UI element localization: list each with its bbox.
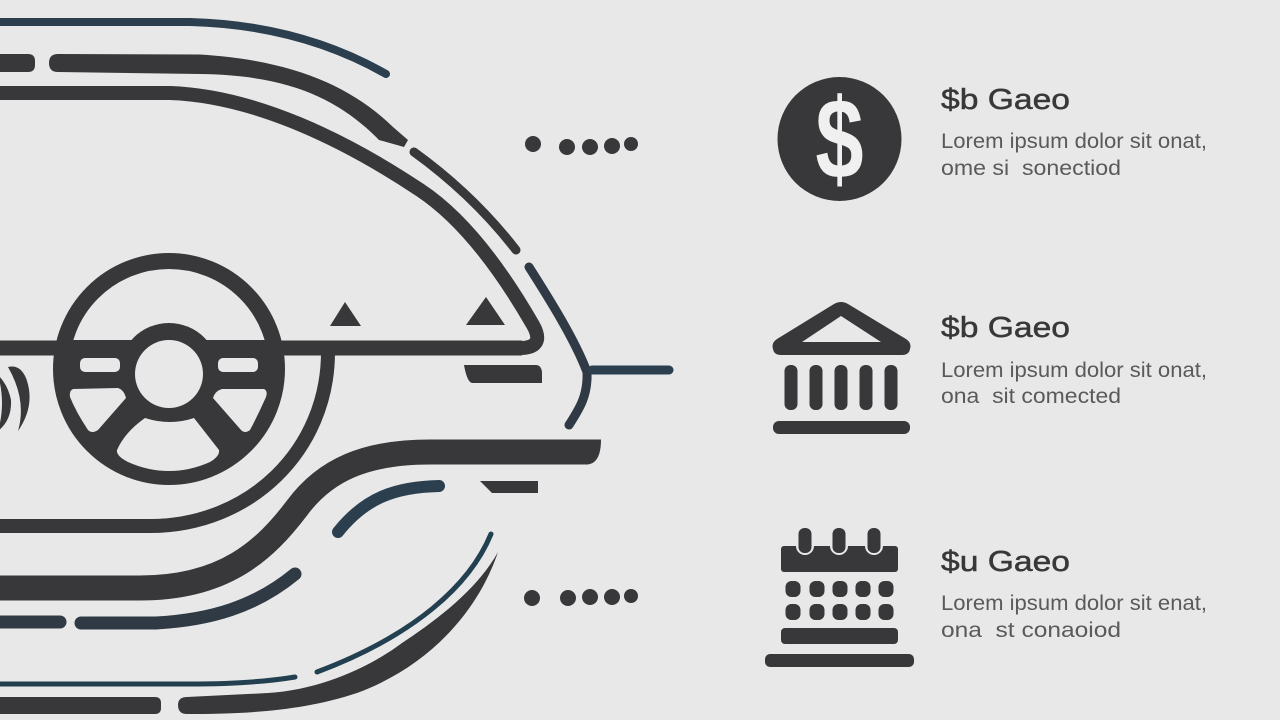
body three: Lorem ipsum dolor sit enat, [941,592,1207,615]
spoke window left [80,358,120,372]
left crescents [0,366,30,431]
heading three: $u Gaeo [941,546,1070,578]
body one line two: ome si sonectiod [941,157,1121,180]
lower left window [70,388,126,432]
triangle small [330,302,361,326]
tapered dark arc [178,552,498,714]
spoke window right [218,358,258,372]
icon: bank building [772,302,910,434]
thin navy arc lower [0,677,295,684]
heading one: $b Gaeo [941,84,1070,116]
heading two: $b Gaeo [941,312,1070,344]
connector line [592,366,669,374]
navy lower arc [81,574,295,623]
lower right window [213,389,267,432]
top navy arc [0,22,386,74]
thin navy arc upper [317,534,491,672]
icon: calendar [765,526,914,667]
outer right arc [529,267,587,425]
crescent inner [0,375,11,431]
body one: Lorem ipsum dolor sit onat, [941,130,1207,153]
small road shape [480,481,538,493]
wheel hub ring [119,323,219,423]
body three line two: ona st conaoiod [941,619,1121,642]
navy mid arc [338,486,439,532]
wheel lower fill [61,340,277,478]
dots top [525,136,638,155]
big s-curve road [0,452,588,588]
horizontal dash bar [0,340,522,356]
dark dash bottom left [0,697,161,714]
navy lower dash left [0,616,60,628]
hub centre [135,340,203,408]
short dark dash upper left [0,54,35,72]
steering wheel [61,261,277,478]
small bar right [464,365,542,383]
wheel rim [61,261,277,477]
body two: Lorem ipsum dolor sit onat, [941,359,1207,382]
illustration: stylised dashboard and road lines [0,22,669,714]
wheel surround arc [0,352,328,526]
dashboard outline [0,93,537,348]
text block: item two [941,312,1207,408]
dots bottom [524,589,638,606]
text block: item one [941,84,1207,180]
body two line two: ona sit comected [941,385,1121,408]
tapered upper arc [49,54,408,147]
upper right arc segment [414,152,516,250]
crescent outer [8,366,30,431]
icon: dollar coin: $ [815,76,864,203]
road end cap [586,440,601,464]
bottom window [117,418,219,471]
text block: item three [941,546,1207,642]
icon: dollar coin [778,76,902,203]
triangle large [466,297,505,325]
